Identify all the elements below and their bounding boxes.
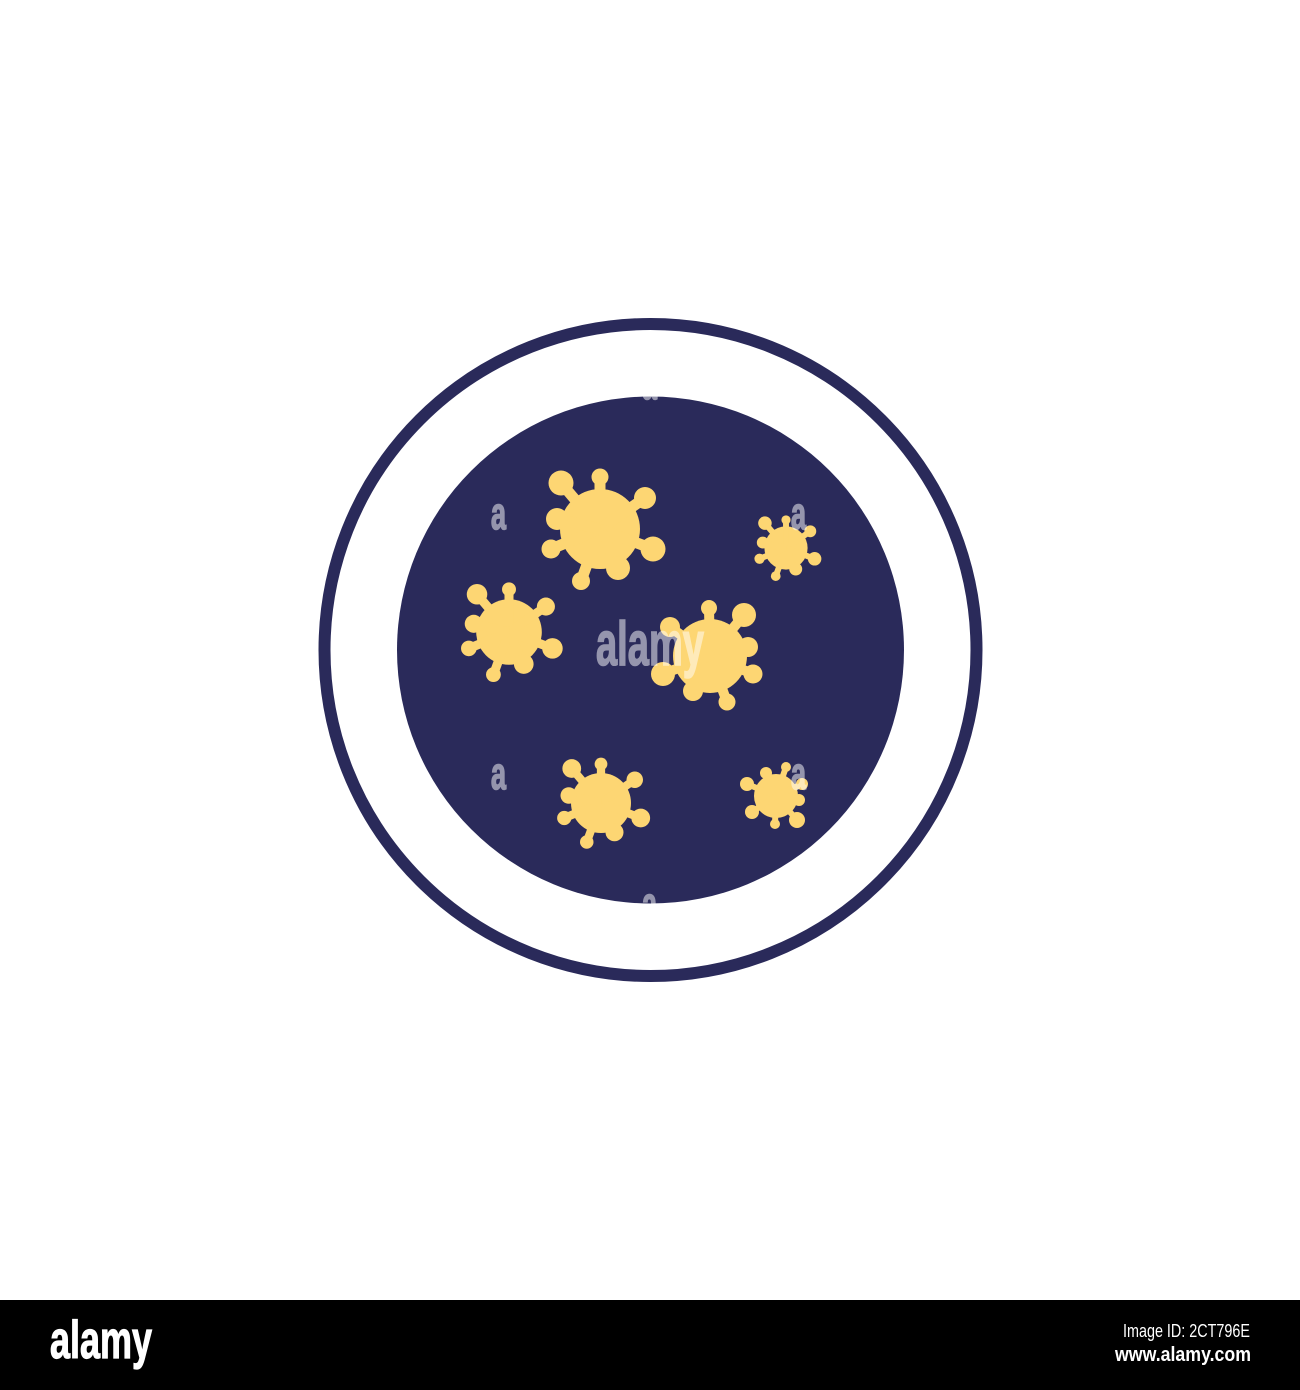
- watermark: a: [642, 878, 658, 929]
- watermark: a: [491, 488, 507, 539]
- virus: centre right: [651, 600, 762, 710]
- virus: bottom right small: [740, 762, 808, 829]
- watermark: a: [491, 748, 507, 799]
- virus: left: [461, 582, 563, 682]
- virus: top right small: [754, 515, 821, 581]
- website: www.alamy.com: [1114, 1344, 1251, 1366]
- footer bar: [0, 1300, 1300, 1390]
- watermark: alamy: [596, 610, 704, 679]
- outer ring of petri dish: [324, 324, 976, 976]
- watermark: a: [642, 358, 658, 409]
- watermark: a: [791, 748, 807, 799]
- image id: Image ID: 2CT796E: [1123, 1321, 1250, 1341]
- footer logo: alamy: [50, 1311, 152, 1370]
- virus: top large: [542, 468, 666, 590]
- watermark: [491, 358, 807, 929]
- virus: bottom: [557, 758, 650, 849]
- inner dark disk: [397, 396, 904, 904]
- watermark: a: [791, 488, 807, 539]
